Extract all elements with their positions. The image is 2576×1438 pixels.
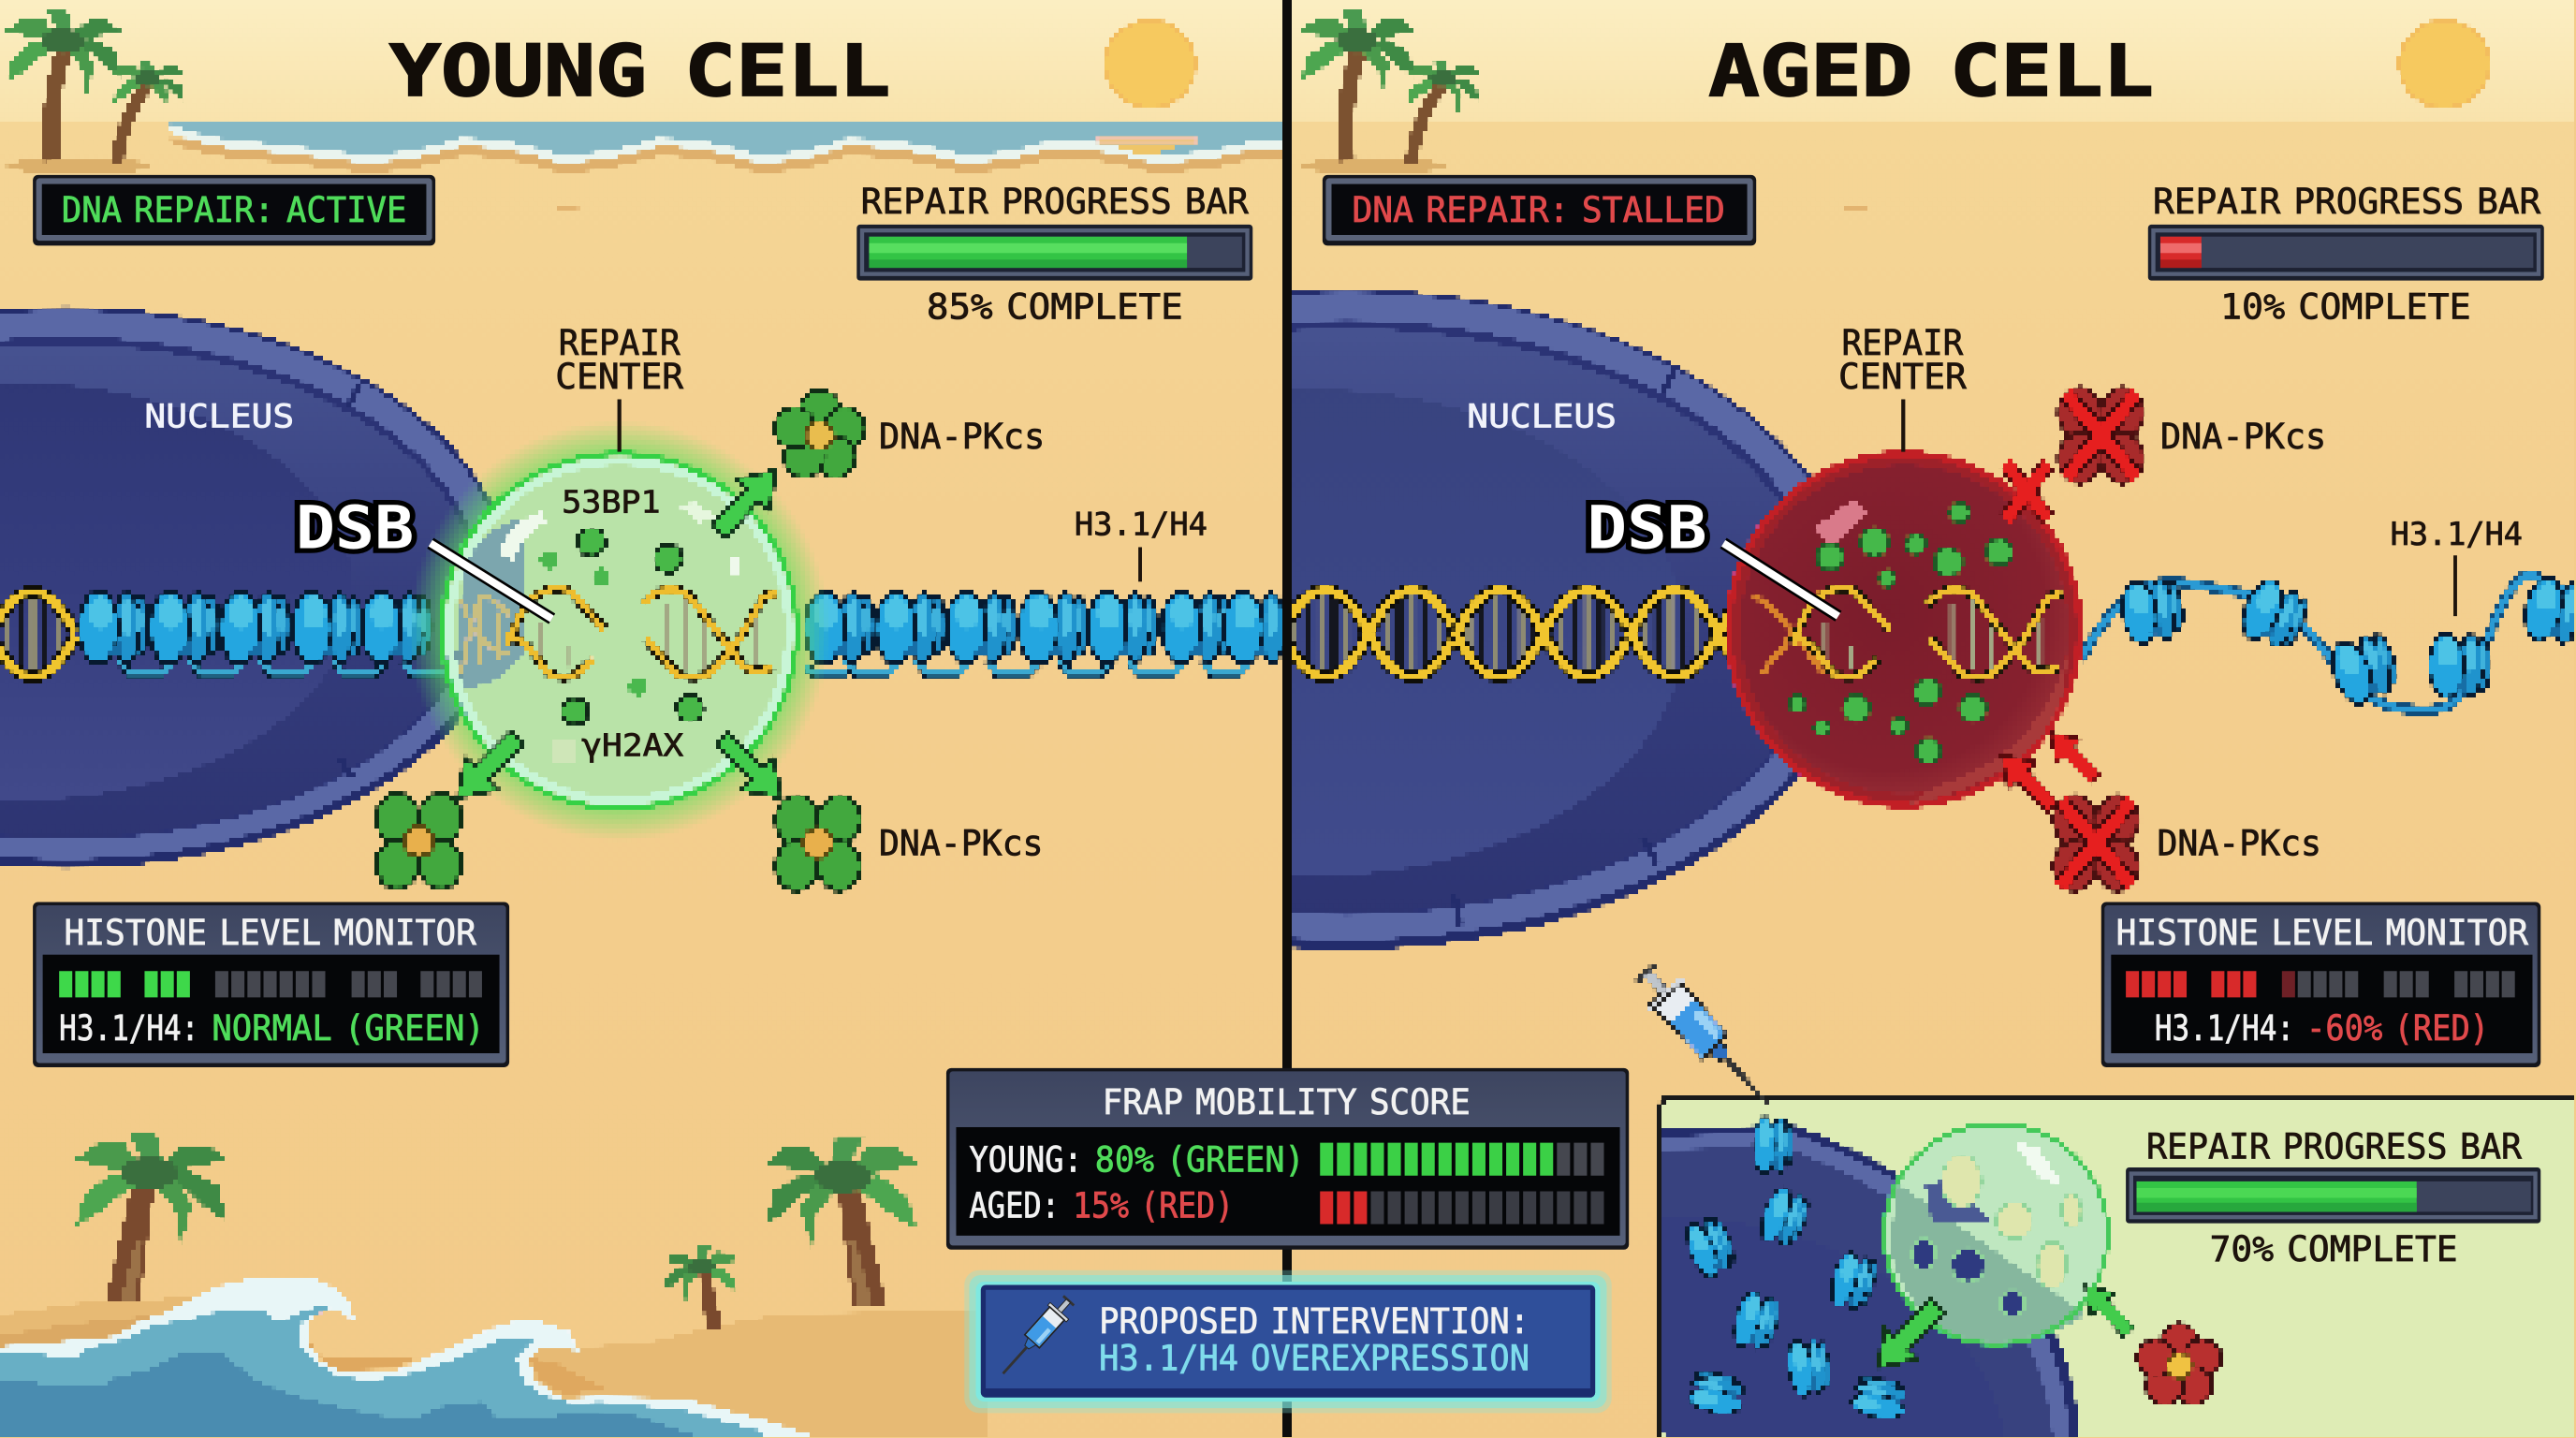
arrow: recruitment down left	[441, 722, 534, 814]
callout: DSB young	[296, 492, 552, 619]
panel: histone monitor young: NORMAL (GREEN)	[212, 1007, 485, 1049]
sea water	[0, 1305, 772, 1438]
level bars young	[59, 971, 482, 997]
inset repair bubble	[1884, 1123, 2108, 1344]
panel: proposed intervention	[964, 1270, 1612, 1413]
broken helix young	[461, 588, 777, 677]
icon: syringe injecting	[1628, 956, 1787, 1122]
panel: FRAP mobility score: AGED:	[970, 1185, 1060, 1226]
title: young cell: YOUNG CELL	[389, 30, 890, 112]
panel: FRAP mobility score: 15% (RED)	[1073, 1185, 1234, 1226]
panel: FRAP mobility score: 80% (GREEN)	[1095, 1138, 1305, 1180]
panel: FRAP mobility score	[946, 1068, 1629, 1250]
nucleus aged	[833, 289, 1862, 949]
label: gamma H2AX: γH2AX	[581, 726, 683, 763]
panel: histone monitor aged: H3.1/H4:	[2155, 1007, 2294, 1049]
progress bar aged: REPAIR PROGRESS BAR	[2153, 181, 2541, 222]
bottom beach with waves	[0, 1277, 986, 1438]
arrow: recruitment down right	[705, 722, 798, 814]
panel: histone monitor aged	[2101, 902, 2540, 1067]
panel: intervention inset	[1649, 1096, 2576, 1438]
label: DNA-PKcs top aged: DNA-PKcs	[2160, 416, 2326, 457]
progress bar inset: 70% COMPLETE	[2210, 1228, 2458, 1269]
panel: proposed intervention: H3.1/H4 OVEREXPRESSION	[1099, 1338, 1530, 1379]
panel: DNA repair status active: DNA REPAIR: ACTIVE	[62, 189, 406, 230]
label: histones aged: H3.1/H4	[2391, 516, 2523, 553]
icon: sun left	[1105, 21, 1195, 108]
progress bar young	[856, 181, 1252, 327]
icon: blocked DNA-PKcs bottom	[2054, 795, 2139, 890]
dots: stalled foci aged	[1789, 503, 2012, 763]
shoreline right	[1462, 120, 2576, 172]
DNA helix aged	[1281, 590, 1806, 677]
repair center aged	[1725, 450, 2083, 809]
nucleus young	[0, 306, 513, 869]
DNA helix young	[0, 592, 76, 677]
icon: sun right	[2399, 21, 2490, 108]
panel: DNA repair status stalled	[1323, 175, 1756, 245]
label: histones young: H3.1/H4	[1075, 506, 1208, 543]
label: repair center aged	[1838, 322, 1967, 452]
panel: DNA repair status active	[33, 175, 435, 245]
panel: histone monitor aged: -60% (RED)	[2306, 1007, 2489, 1049]
panel: histone monitor young: HISTONE LEVEL MONITOR	[64, 912, 476, 953]
broken helix aged	[1754, 588, 2062, 677]
deep water	[0, 1352, 707, 1438]
icon: DNA-PKcs flower bottom right	[775, 795, 861, 890]
panel: FRAP mobility score: FRAP MOBILITY SCORE	[1103, 1081, 1471, 1123]
divider between panels	[1283, 0, 1293, 1438]
label: DNA-PKcs top young: DNA-PKcs	[879, 416, 1045, 457]
level bars aged	[2126, 971, 2515, 997]
palms top right	[1299, 10, 1480, 174]
icon: syringe	[994, 1291, 1078, 1382]
panel: FRAP mobility score: YOUNG:	[970, 1138, 1083, 1180]
label: nucleus young: NUCLEUS	[144, 397, 294, 435]
progress bar aged	[2148, 181, 2544, 327]
label: repair center aged: CENTER	[1838, 356, 1967, 397]
dots: 53BP1 foci young	[540, 528, 703, 725]
label: repair center aged: REPAIR	[1841, 322, 1964, 363]
arrow: recruitment up right	[701, 454, 793, 548]
label: DNA-PKcs bottom young: DNA-PKcs	[879, 823, 1043, 864]
progress bar young: 85% COMPLETE	[927, 286, 1183, 327]
loose chromatin aged	[2080, 575, 2576, 711]
progress bar young: REPAIR PROGRESS BAR	[861, 181, 1249, 222]
palms on bottom beach	[74, 1132, 918, 1330]
arrow: histones released	[1861, 1290, 1954, 1384]
label: nucleus aged: NUCLEUS	[1467, 397, 1617, 435]
wet sand rims	[305, 1336, 419, 1371]
icon: red flower	[2137, 1324, 2221, 1404]
panel: DNA repair status stalled: DNA REPAIR: STALLED	[1352, 189, 1725, 230]
progress bar inset: REPAIR PROGRESS BAR	[2146, 1125, 2522, 1167]
inset nucleus	[1649, 1123, 2080, 1438]
label: 53BP1: 53BP1	[562, 484, 661, 521]
panel: histone monitor young	[33, 902, 509, 1067]
title: aged cell: AGED CELL	[1708, 30, 2154, 112]
shoreline left	[168, 120, 1284, 172]
arrow: blocked red two	[1987, 741, 2066, 820]
callout: DSB young: DSB	[296, 492, 414, 562]
callout: DSB aged: DSB	[1587, 492, 1707, 562]
callout: DSB aged	[1587, 492, 1838, 616]
arrow: blocked red one	[2038, 721, 2109, 791]
FRAP bars aged	[1320, 1191, 1604, 1225]
progress bar inset	[2126, 1125, 2540, 1269]
panel: histone monitor young: H3.1/H4:	[59, 1007, 198, 1049]
sea foam	[0, 1277, 822, 1438]
panel: proposed intervention: PROPOSED INTERVENTION:	[1099, 1300, 1530, 1342]
label: DNA-PKcs bottom aged: DNA-PKcs	[2157, 823, 2321, 864]
icon: DNA-PKcs flower bottom left	[376, 794, 461, 889]
icon: DNA-PKcs flower top young	[774, 390, 865, 477]
label: repair center young: REPAIR	[559, 322, 681, 363]
icon: red X block	[2006, 463, 2049, 520]
icon: blocked DNA-PKcs top	[2058, 388, 2144, 483]
arrow: DNA-PKcs returning	[2072, 1274, 2142, 1344]
panel: histone monitor aged: HISTONE LEVEL MONITOR	[2116, 912, 2528, 953]
nucleosome chain young	[79, 592, 1294, 674]
repair center young	[409, 420, 829, 842]
palms top left	[5, 10, 185, 174]
FRAP bars young	[1320, 1143, 1604, 1176]
label: repair center young: CENTER	[555, 356, 683, 397]
progress bar aged: 10% COMPLETE	[2220, 286, 2471, 327]
label: repair center young	[555, 322, 683, 452]
inset histones	[1681, 1117, 1910, 1422]
